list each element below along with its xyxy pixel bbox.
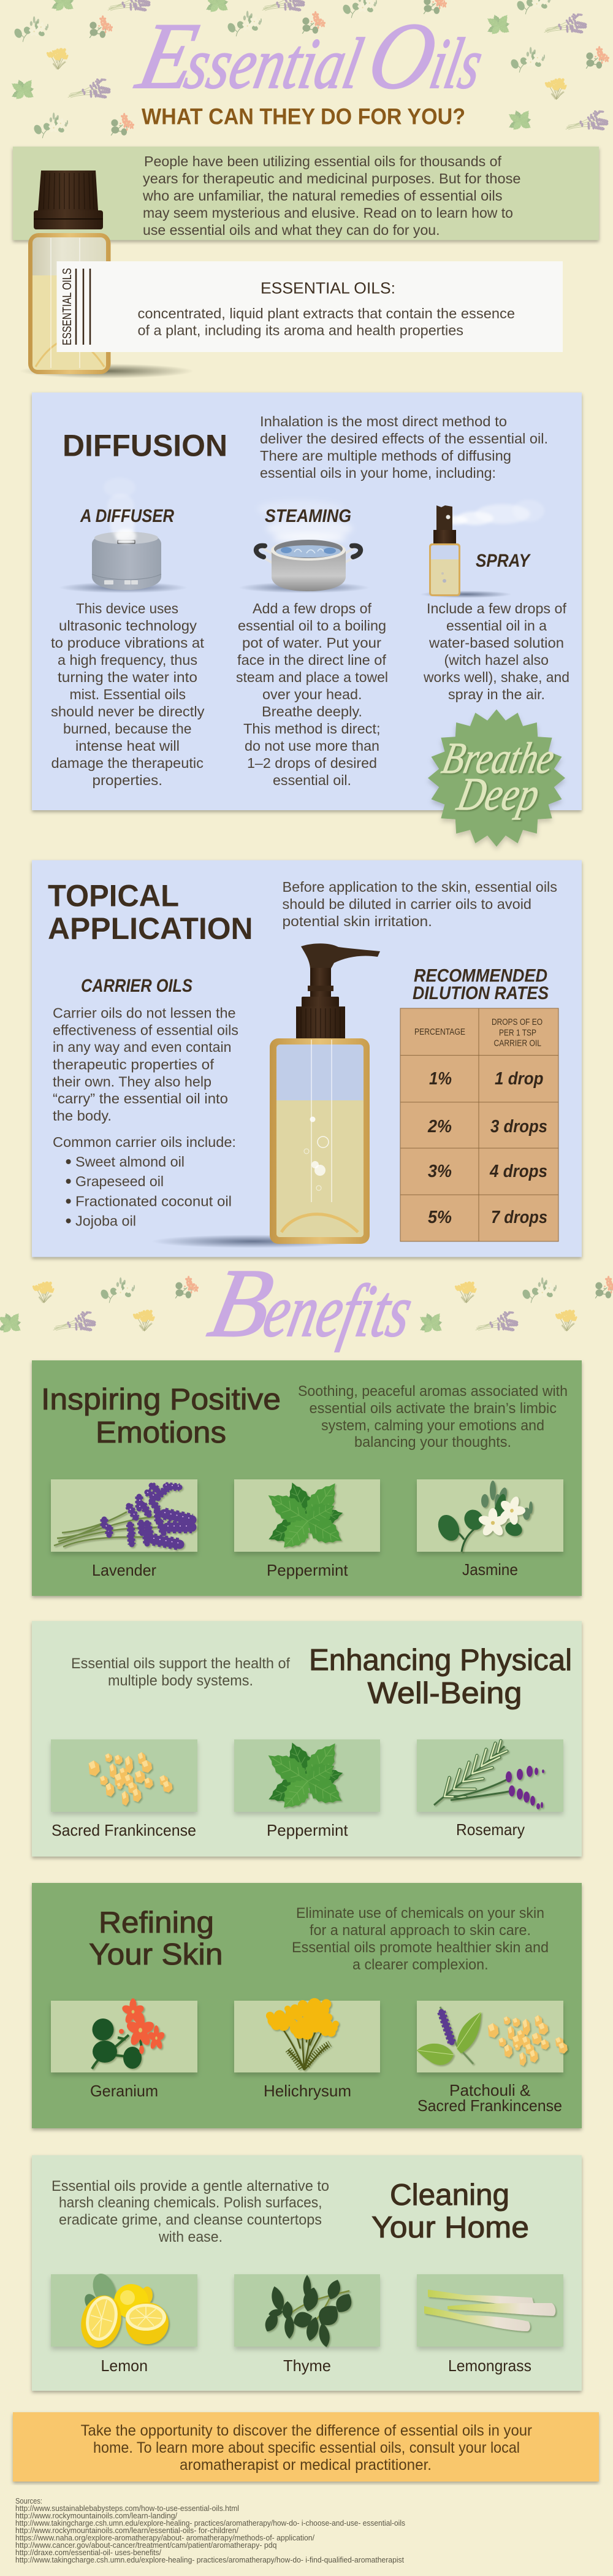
illustration: pump bottle [151,943,380,1248]
heading: Emotions [96,1416,226,1449]
dilution table: 1 drop [495,1069,543,1089]
heading [89,1906,223,1971]
intro text: People have been utilizing essential oils for thousands of [144,153,502,169]
topical intro text [282,879,557,929]
panel: inspiring positive emotions [32,1360,582,1596]
carrier oils text: therapeutic properties of [53,1057,215,1073]
sources: http://www.cancer.gov/about-cancer/treatment/cam/patient/aromatherapy- pdq [15,2541,277,2550]
definition heading: ESSENTIAL OILS: [261,278,395,297]
method text: diffuser: properties. [92,772,162,788]
card: lemon: Lemon [101,2356,148,2375]
method text: diffuser: a high frequency, thus [58,652,197,668]
heading [309,1644,572,1710]
card: thyme: Thyme [283,2356,331,2375]
method text: spray: works well), shake, and [423,669,569,685]
description: Eliminate use of chemicals on your skin [296,1905,544,1922]
method text: spray: water-based solution [428,635,564,651]
carrier oils list: Grapeseed oil [75,1173,164,1189]
method text: diffuser: intense heat will [75,738,180,754]
method text: diffuser: This device uses [76,600,178,616]
method heading: spray: SPRAY [476,551,531,571]
panel: essential oils definition [56,261,563,352]
badge text: Deep [453,769,544,820]
decorative herb pattern: header [10,0,609,138]
method text: diffuser: ultrasonic technology [59,618,197,634]
carrier oils list: Fractionated coconut oil [75,1194,232,1209]
intro text [142,153,520,238]
sources: Sources: [15,2497,42,2505]
dilution heading [413,966,549,1003]
method text: spray: essential oil in a [446,618,547,634]
carrier oils text: “carry” the essential oil into [53,1091,228,1106]
card: rosemary [417,1739,563,1839]
method text: steaming: do not use more than [245,738,379,754]
method text: spray: (witch hazel also [444,652,549,668]
method text: steaming: essential oil. [273,772,351,788]
heading: Your Home [371,2211,529,2244]
description: essential oils activate the brain’s limbic [309,1400,557,1417]
method text: steaming: face in the direct line of [237,652,387,668]
intro text: who are unfamiliar, the natural remedies of essential oils [142,188,502,204]
carrier oils text: effectiveness of essential oils [53,1022,238,1038]
dilution table: 4 drops [489,1162,547,1181]
method text: diffuser: mist. Essential oils [70,686,186,702]
badge text: Breathe [438,734,559,783]
badge text [438,734,559,820]
subtitle: WHAT CAN THEY DO FOR YOU? [142,104,465,129]
panel: introduction [13,147,599,240]
card: peppermint: Peppermint [267,1561,348,1579]
card: lavender: Lavender [92,1561,156,1579]
dilution table: 3% [428,1162,452,1181]
description [71,1655,290,1689]
description: system, calming your emotions and [321,1417,544,1434]
card: rosemary: Rosemary [456,1820,525,1839]
title: ils [424,23,489,104]
illustration: spray bottle [420,500,544,598]
card: patchouli and sacred frankincense: Patchouli & [449,2081,530,2099]
dilution table: PER 1 TSP [499,1028,536,1038]
description: Essential oils support the health of [71,1655,290,1672]
sources: http://www.sustainablebabysteps.com/how-to-use-essential-oils.html [15,2504,239,2513]
heading: Well-Being [368,1677,522,1710]
dilution table: 2% [427,1117,452,1137]
card: jasmine: Jasmine [462,1560,518,1579]
description [292,1905,549,1973]
topical heading [48,878,253,946]
card: sacred frankincense [51,1739,197,1839]
card: geranium [51,1998,197,2100]
diffusion intro text: deliver the desired effects of the essential oil. [260,431,548,447]
method text: steaming: pot of water. Put your [242,635,381,651]
panel: refining your skin [32,1883,582,2128]
carrier oils text: in any way and even contain [53,1039,232,1055]
title: ssential [179,23,369,104]
method text: spray [423,600,569,702]
title: O [360,3,445,109]
description: balancing your thoughts. [354,1434,511,1451]
description: eradicate grime, and cleanse countertops [59,2212,322,2228]
method heading: a diffuser: A DIFFUSER [80,506,174,526]
carrier oils text: the body. [53,1108,112,1124]
card: peppermint [234,1736,380,1839]
bottle label stripes [76,269,90,345]
card: helichrysum: Helichrysum [264,2082,351,2100]
method text: diffuser: damage the therapeutic [51,755,204,771]
topical intro text: Before application to the skin, essential oils [282,879,557,895]
heading: Refining [99,1906,214,1939]
carrier oils text: Common carrier oils include: [53,1134,236,1150]
carrier oils text: their own. They also help [53,1073,211,1089]
topical heading: TOPICAL [48,878,179,913]
method text: spray: Include a few drops of [427,600,567,616]
dilution table: 1% [429,1069,452,1089]
diffusion heading: DIFFUSION [63,429,227,463]
bottle label text: ESSENTIAL OILS [61,268,74,345]
dilution table: 7 drops [491,1208,547,1227]
dilution table: CARRIER OIL [494,1039,541,1049]
dilution heading: DILUTION RATES [413,983,549,1003]
carrier oils list [66,1154,232,1229]
heading: benefits: enefits [257,1269,419,1352]
sources: http://www.rockymountainoils.com/learn-landing/ [15,2512,178,2520]
sources: http://www.takingcharge.csh.umn.edu/explore-healing- practices/aromatherapy/how-do- i-find-qualified-aromatherapist [15,2556,405,2564]
decorative herb pattern: benefits [0,1276,613,1335]
card: patchouli and sacred frankincense: Sacred Frankincense [417,2096,562,2115]
panel: call to action: home. To learn more about specific essential oils, consult your local [93,2439,520,2456]
heading [371,2179,529,2244]
method text: spray: spray in the air. [448,686,545,702]
description: Essential oils promote healthier skin and [292,1939,549,1956]
method heading: steaming: STEAMING [265,506,351,526]
topical intro text: should be diluted in carrier oils to avoid [282,896,531,912]
panel: topical application [32,860,582,1257]
description: harsh cleaning chemicals. Polish surfaces, [59,2195,322,2211]
dilution table: PERCENTAGE [414,1027,465,1037]
definition text: of a plant, including its aroma and health properties [137,323,463,339]
illustration: essential oil bottle [20,171,194,378]
definition text [137,305,515,339]
heading: Cleaning [390,2179,509,2212]
dilution table: DROPS OF EO [492,1018,543,1027]
sources [15,2497,405,2564]
sources: https://www.naha.org/explore-aromatherapy/about- aromatherapy/methods-of- application/ [15,2534,315,2542]
method text: steaming: Breathe deeply. [262,703,362,719]
heading: Your Skin [89,1938,223,1971]
title: E [129,3,206,109]
illustration: diffuser [59,478,188,593]
description [298,1383,568,1451]
description: Essential oils provide a gentle alternative to [51,2178,329,2195]
intro text: use essential oils and what they can do for you. [143,222,440,238]
panel: diffusion [32,393,582,810]
diffusion intro text [260,413,548,481]
method text: steaming: steam and place a towel [236,669,388,685]
panel: call to action: Take the opportunity to discover the difference of essential oils in your [81,2422,532,2439]
card: helichrysum [234,1998,380,2100]
heading: Inspiring Positive [41,1383,281,1416]
card: geranium: Geranium [90,2082,158,2100]
method text: diffuser: turning the water into [58,669,197,685]
method text: steaming: Add a few drops of [253,600,372,616]
topical intro text: potential skin irritation. [282,913,432,929]
description: multiple body systems. [108,1673,253,1689]
card: lemongrass: Lemongrass [448,2356,531,2375]
method text: diffuser: burned, because the [63,721,191,737]
description: for a natural approach to skin care. [310,1922,531,1939]
card: jasmine [417,1479,563,1579]
method text: diffuser: to produce vibrations at [51,635,205,651]
panel: enhancing physical well-being [32,1621,582,1857]
diffusion intro text: Inhalation is the most direct method to [260,413,507,429]
method text: diffuser: should never be directly [51,703,205,719]
diffusion intro text: There are multiple methods of diffusing [260,448,511,464]
topical heading: APPLICATION [48,911,253,946]
card: peppermint [234,1476,380,1579]
dilution table [400,1008,558,1241]
heading: benefits: B [201,1249,282,1357]
method text: steaming: This method is direct; [243,721,380,737]
method text: steaming [236,600,388,788]
card: peppermint: Peppermint [267,1821,348,1839]
definition text: concentrated, liquid plant extracts that contain the essence [137,305,515,321]
card: thyme [234,2274,380,2375]
method text: steaming: 1–2 drops of desired [247,755,377,771]
method text: steaming: essential oil to a boiling [238,618,386,634]
diffusion intro text: essential oils in your home, including: [260,465,496,481]
heading: Enhancing Physical [309,1644,572,1677]
card: sacred frankincense: Sacred Frankincense [51,1821,196,1839]
panel: cleaning your home [32,2155,582,2391]
dilution table: 5% [428,1208,452,1227]
illustration: steaming pot [238,500,370,593]
carrier oils text: Carrier oils do not lessen the [53,1005,236,1021]
description: with ease. [158,2229,223,2245]
carrier oils list: Sweet almond oil [75,1154,185,1170]
badge: breathe deep [428,709,565,846]
dilution table: 3 drops [490,1117,547,1137]
method text: steaming: over your head. [262,686,362,702]
panel: call to action: aromatherapist or medical practitioner. [180,2456,432,2474]
method text: diffuser [51,600,205,788]
intro text: may seem mysterious and elusive. Read on to learn how to [143,205,513,221]
sources: http://www.rockymountainoils.com/learn/essential-oils- for-children/ [15,2526,239,2535]
carrier oils text [53,1005,238,1150]
description: Soothing, peaceful aromas associated with [298,1383,568,1400]
card: lemon [51,2271,197,2375]
sources: http://www.takingcharge.csh.umn.edu/explore-healing- practices/aromatherapy/how-do- i-choose-and-use- essential-oils [15,2519,405,2528]
heading [41,1383,281,1449]
panel: call to action [13,2412,599,2482]
carrier oils list: Jojoba oil [75,1213,136,1229]
carrier oils heading: CARRIER OILS [81,976,192,996]
dilution heading: RECOMMENDED [414,966,547,986]
card: lavender [51,1479,197,1579]
intro text: years for therapeutic and medicinal purposes. But for those [143,171,521,186]
card: patchouli and sacred frankincense [417,2001,568,2115]
card: lemongrass [417,2274,563,2375]
description: a clearer complexion. [352,1957,489,1973]
description [51,2178,329,2245]
sources: http://draxe.com/essential-oil- uses-benefits/ [15,2548,162,2557]
